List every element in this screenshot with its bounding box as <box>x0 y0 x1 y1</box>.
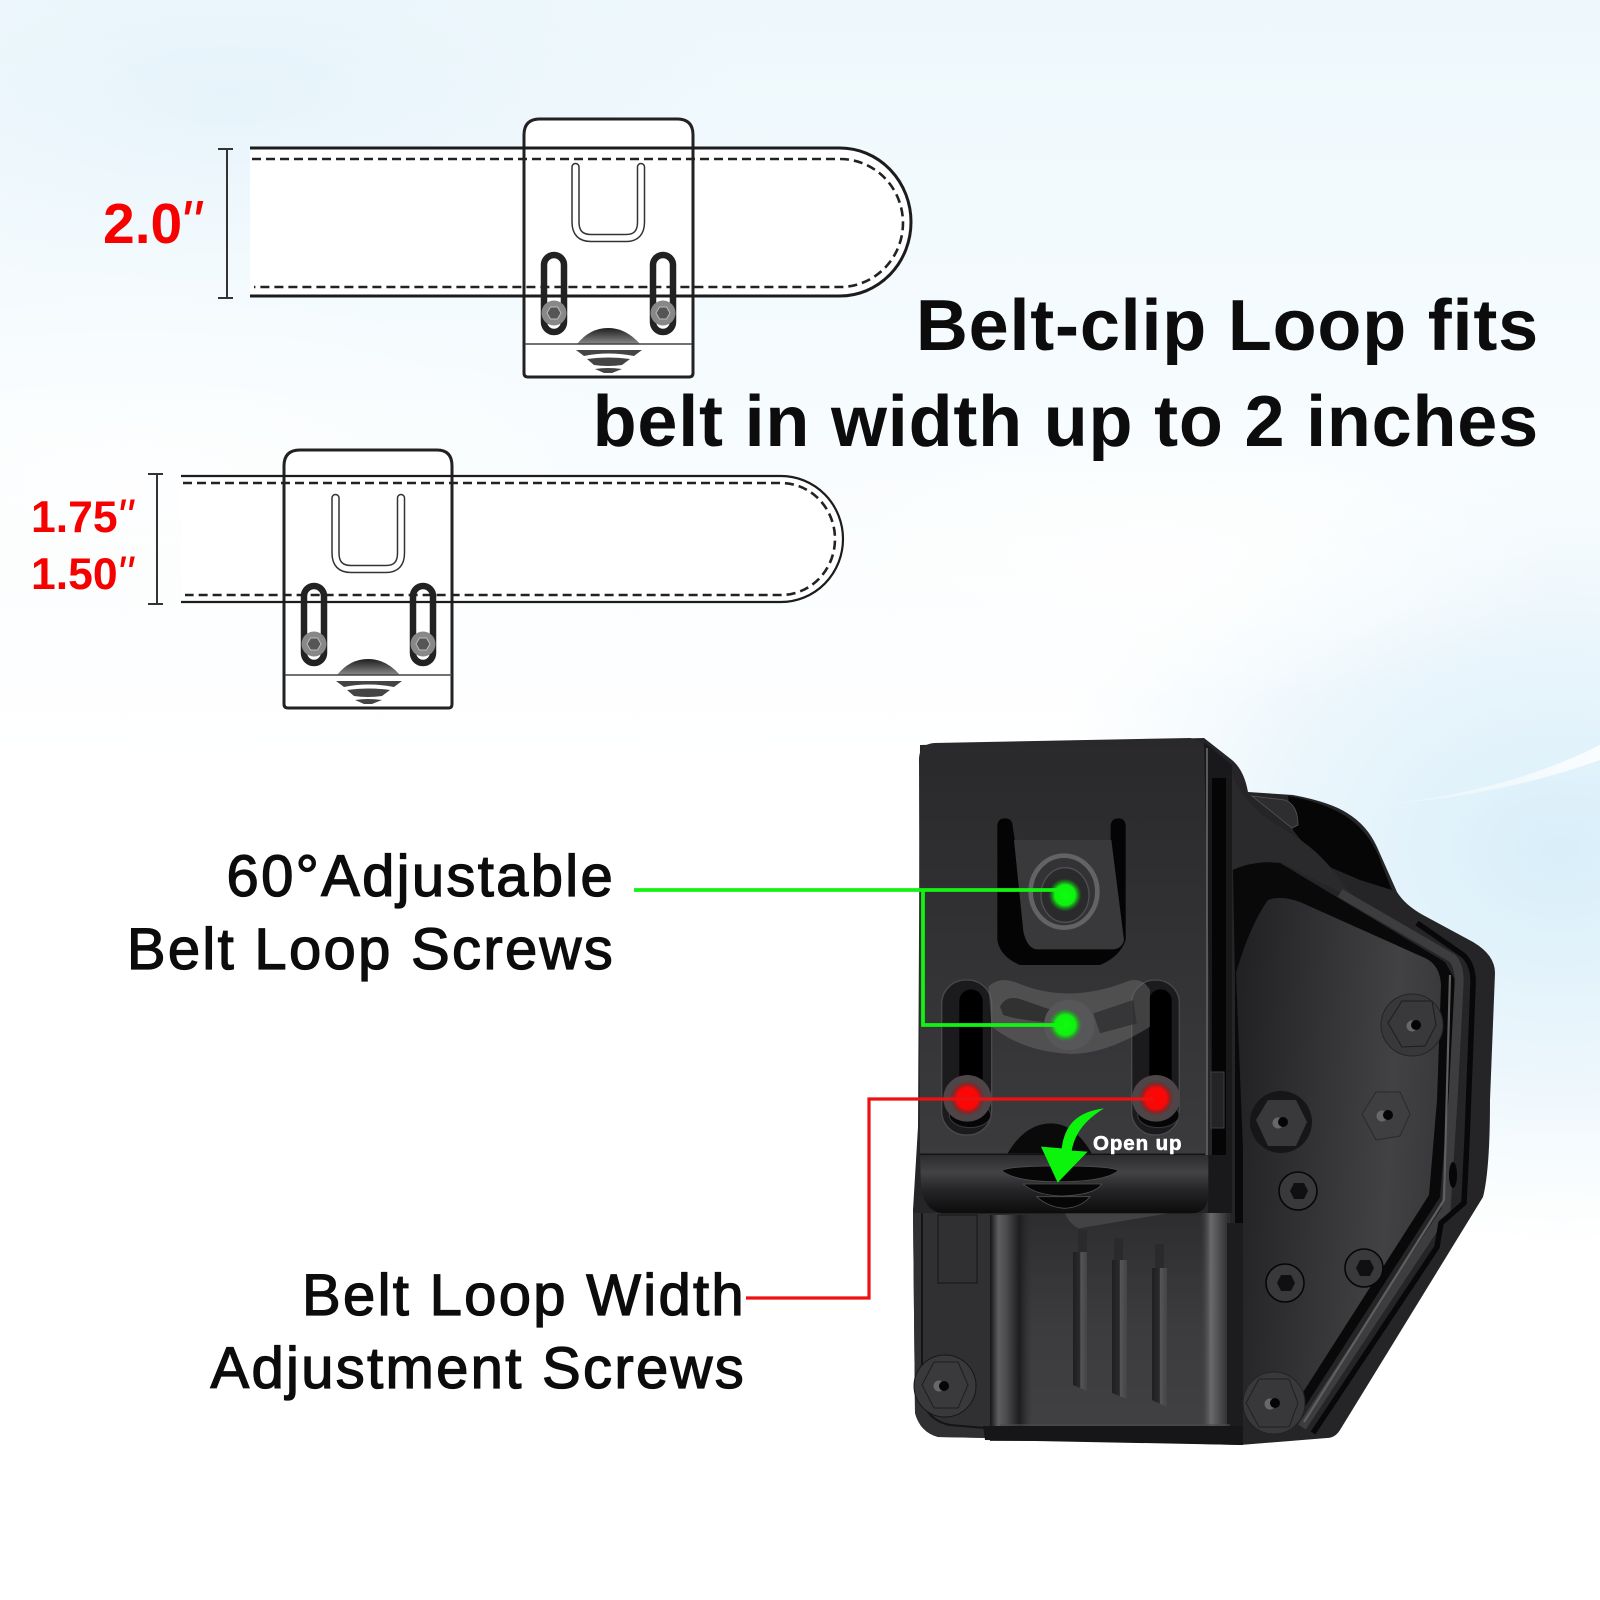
left width slot <box>942 980 992 1135</box>
icon: green open-up arrow <box>1041 1108 1104 1183</box>
paddle opening <box>1288 796 1392 890</box>
screw socket three <box>1345 1249 1383 1287</box>
callout label: adjustable screws: Belt Loop Screws <box>127 917 615 982</box>
clip plate outline 2.0 <box>524 119 693 377</box>
dimension labels 1.75 and 1.50: " <box>116 491 135 544</box>
belt outline 1.75 <box>181 476 843 602</box>
clip plate outline 1.75 <box>284 450 452 708</box>
clip and screws on the plate <box>942 818 1180 1135</box>
dimension bracket 2.0 <box>218 149 233 298</box>
belt stitching 2.0 <box>252 159 903 287</box>
callout label: width screws: Adjustment Screws <box>210 1336 746 1401</box>
release latch band <box>920 1155 1208 1213</box>
paddle shoulder <box>1252 796 1298 828</box>
dimension labels 1.75 and 1.50 <box>31 491 135 601</box>
headline: Belt-clip Loop fits <box>916 286 1539 366</box>
left edge groove <box>922 1213 985 1428</box>
latch ribs <box>1002 1166 1118 1208</box>
callout lines: green <box>634 890 1064 1025</box>
dimension labels 1.75 and 1.50: 1.50 <box>31 550 118 599</box>
callout label: adjustable screws: 60°Adjustable <box>227 844 615 909</box>
screw upper right <box>1381 994 1443 1056</box>
housing right post <box>1200 1213 1227 1430</box>
adjustment arc band <box>988 980 1150 1054</box>
housing left post <box>990 1215 1032 1430</box>
hinge tabs <box>1211 1072 1224 1128</box>
belt fill 2.0 <box>250 148 911 296</box>
left width screw <box>943 1075 991 1128</box>
callout lines: red <box>746 1099 1155 1298</box>
dimension bracket 1.75 <box>148 474 163 604</box>
plate hinge edge <box>1204 742 1232 1213</box>
latch in zoomed frame <box>920 1108 1208 1228</box>
belt outline 2.0 <box>250 148 911 296</box>
holster body silhouette <box>913 738 1495 1445</box>
belt loop plate <box>919 738 1206 1155</box>
black gap around panel <box>1233 862 1458 1410</box>
right width slot <box>1132 980 1179 1135</box>
headline: belt in width up to 2 inches <box>593 382 1539 462</box>
holster illustration <box>913 738 1495 1445</box>
callout label: adjustable screws <box>127 844 615 982</box>
label recess <box>938 1215 977 1283</box>
rim band <box>1302 893 1459 1427</box>
housing bottom lip <box>983 1426 1243 1445</box>
screw socket one <box>1279 1172 1317 1210</box>
belt fill 1.75 <box>181 476 843 602</box>
side screws <box>914 994 1443 1434</box>
screw socket two <box>1266 1264 1304 1302</box>
belt diagram: 1.75 and 1.50 inch belt with clip <box>181 450 843 708</box>
magazine housing <box>990 1213 1230 1441</box>
screw bottom left <box>914 1355 976 1417</box>
screw bottom right <box>1243 1372 1305 1434</box>
top screw <box>1031 856 1097 928</box>
housing dark edge <box>1227 1223 1243 1443</box>
screw hex right <box>1362 1092 1410 1140</box>
arc groove <box>1000 998 1053 1023</box>
callout label: width screws <box>210 1263 746 1401</box>
middle screw <box>1044 1000 1095 1050</box>
lit body panel <box>1236 898 1441 1420</box>
rim hole <box>1449 1162 1457 1188</box>
dimension label 2.0: " <box>179 189 204 258</box>
housing ribs <box>1073 1252 1167 1407</box>
faint upper rib ghosts <box>1078 1230 1164 1268</box>
outer black groove <box>1313 923 1473 1433</box>
callout label: width screws: Belt Loop Width <box>302 1263 746 1328</box>
screw large centre <box>1250 1091 1312 1153</box>
dimension label 2.0: 2.0 <box>103 192 182 256</box>
bottom catch <box>1065 1213 1168 1228</box>
headline <box>593 286 1539 462</box>
clip details 1.75 <box>285 498 452 704</box>
rim highlight <box>1304 975 1450 1422</box>
lower-left body panel <box>913 1213 992 1438</box>
clip details 2.0 <box>525 167 692 373</box>
top clip slot <box>997 818 1126 965</box>
hinge slot <box>1212 778 1226 1155</box>
right width screw <box>1132 1075 1180 1128</box>
clip tongue <box>1014 840 1124 949</box>
dimension labels 1.75 and 1.50: 1.75 <box>31 493 118 542</box>
belt diagram: 2.0 inch belt with clip <box>250 119 911 377</box>
dimension labels 1.75 and 1.50: " <box>116 548 135 601</box>
open up label: Open up <box>1093 1132 1182 1155</box>
belt stitching 1.75 <box>183 483 835 595</box>
release latch dome <box>1008 1123 1092 1153</box>
